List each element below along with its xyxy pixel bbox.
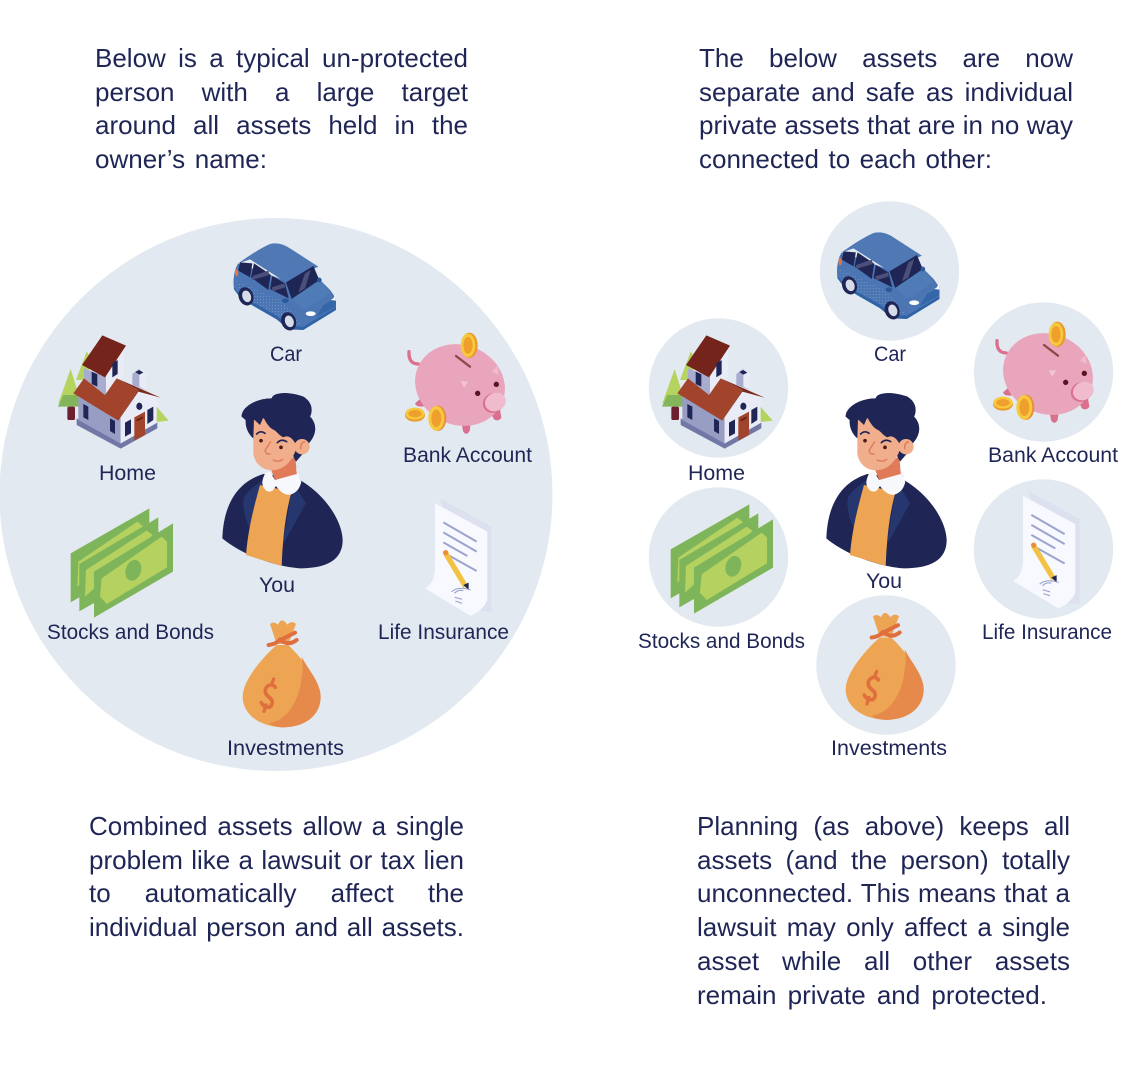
icon: home — [662, 335, 773, 449]
text block: conclusion right: assets (and the person) totally — [697, 845, 1070, 875]
label: car: Car — [874, 342, 906, 366]
icon: car — [234, 243, 336, 333]
text block: intro right — [699, 43, 1074, 174]
text block: intro left: Below is a typical un-protected — [95, 43, 468, 73]
text block: conclusion left: individual person and all assets. — [89, 912, 464, 942]
car circle — [820, 201, 959, 341]
text block: conclusion left: to automatically affect the — [89, 878, 464, 908]
icon: person — [222, 393, 343, 568]
icon: money bag — [846, 613, 924, 720]
text block: intro right: private assets that are in no way — [699, 110, 1073, 140]
text block: conclusion right — [697, 811, 1070, 1010]
label: stocks and bonds: Stocks and Bonds — [638, 629, 805, 653]
icon: signed document — [425, 498, 492, 616]
panel: unprotected person, all assets in one target — [0, 218, 552, 771]
icon: banknotes — [71, 508, 173, 618]
bank account circle — [974, 302, 1113, 442]
label: home: Home — [688, 461, 745, 485]
text block: intro left: person with a large target — [95, 77, 468, 107]
text block: intro right: The below assets are now — [699, 43, 1073, 73]
icon: car — [837, 232, 939, 322]
text block: conclusion right: unconnected. This means that a — [697, 878, 1070, 908]
text block: intro right: separate and safe as individual — [699, 77, 1073, 107]
icon: money bag — [243, 620, 321, 727]
text block: intro left: owner’s name: — [95, 144, 267, 174]
text block: conclusion right: lawsuit may only affect a single — [697, 912, 1070, 942]
text block: intro left — [95, 43, 468, 174]
label: bank account: Bank Account — [403, 443, 532, 467]
label: home: Home — [99, 461, 156, 485]
label: investments: Investments — [831, 736, 947, 760]
text block: conclusion left — [89, 811, 464, 942]
icon: signed document — [1013, 491, 1080, 608]
label: life insurance: Life Insurance — [378, 620, 509, 644]
text block: conclusion right: remain private and protected. — [697, 980, 1047, 1010]
panel: protected person, assets in separate circles — [638, 201, 1118, 760]
label: car: Car — [270, 342, 302, 366]
label: you: You — [259, 573, 295, 597]
label: life insurance: Life Insurance — [982, 620, 1112, 644]
investments circle — [816, 595, 956, 735]
label: bank account: Bank Account — [988, 443, 1118, 467]
label: investments: Investments — [227, 736, 344, 760]
home circle — [649, 318, 788, 458]
icon: banknotes — [671, 504, 773, 614]
icon: home — [58, 335, 169, 449]
icon: piggy bank — [403, 331, 517, 439]
icon: person — [826, 393, 947, 568]
life insurance circle — [974, 479, 1113, 619]
text block: conclusion left: Combined assets allow a single — [89, 811, 464, 841]
label: stocks and bonds: Stocks and Bonds — [47, 620, 214, 644]
text block: conclusion right: asset while all other assets — [697, 946, 1070, 976]
text block: intro right: connected to each other: — [699, 144, 992, 174]
text block: conclusion right: Planning (as above) keeps all — [697, 811, 1070, 841]
label: you: You — [866, 569, 902, 593]
stocks and bonds circle — [649, 487, 788, 627]
large target circle — [0, 218, 552, 771]
text block: conclusion left: problem like a lawsuit or tax lien — [89, 845, 464, 875]
text block: intro left: around all assets held in the — [95, 110, 468, 140]
icon: piggy bank — [991, 320, 1105, 428]
